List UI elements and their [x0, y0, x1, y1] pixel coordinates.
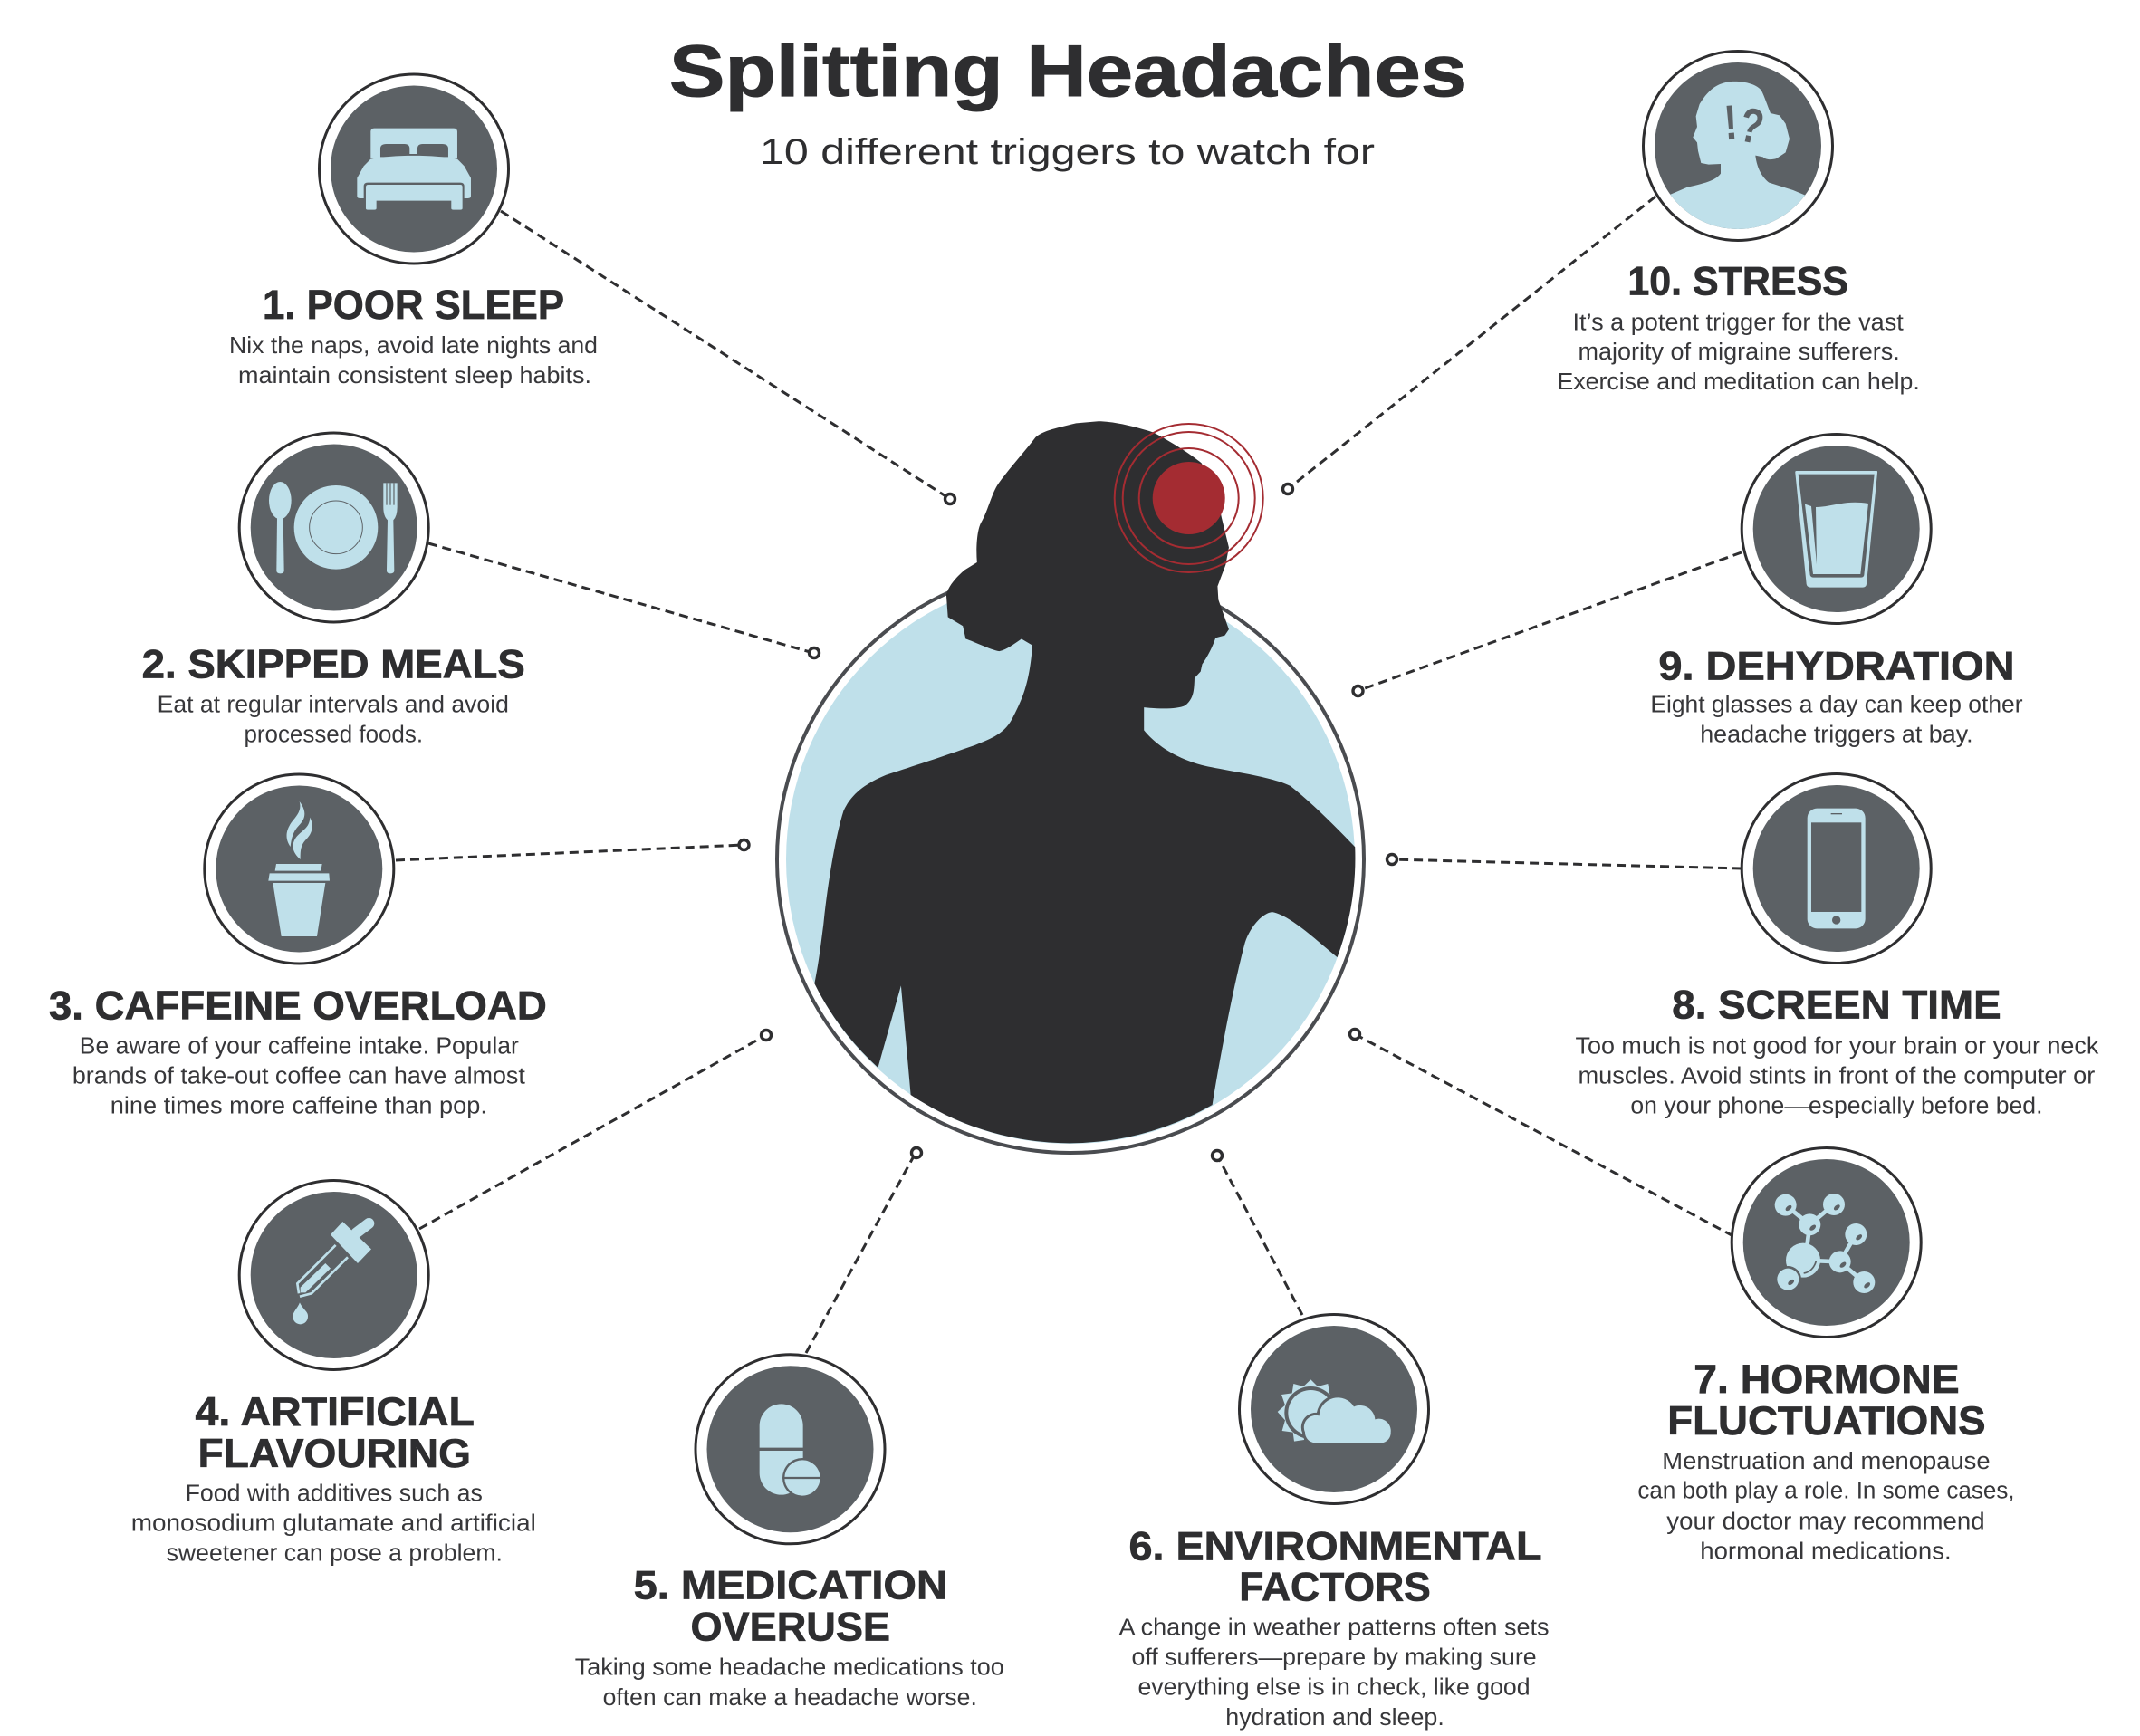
heading: 8. SCREEN TIME	[1672, 982, 2001, 1028]
description: muscles. Avoid stints in front of the computer or	[1579, 1064, 2096, 1089]
description	[1637, 1449, 2015, 1565]
description: on your phone—especially before bed.	[1630, 1094, 2042, 1119]
icon: bed	[319, 74, 509, 264]
heading: 4. ARTIFICIAL	[196, 1388, 475, 1434]
description	[575, 1654, 1004, 1711]
description: maintain consistent sleep habits.	[238, 361, 591, 388]
icon: stressed head: ?	[1734, 97, 1769, 156]
woman silhouette	[814, 421, 1355, 1143]
description: can both play a role. In some cases,	[1637, 1479, 2015, 1504]
panel: caffeine overload	[49, 774, 547, 1119]
connector lines	[396, 197, 1742, 1353]
description	[229, 331, 598, 388]
heading: OVERUSE	[690, 1603, 890, 1649]
panel: skipped meals	[142, 433, 525, 747]
description: majority of migraine sufferers.	[1579, 340, 1900, 365]
heading: 2. SKIPPED MEALS	[142, 641, 525, 687]
heading: FLAVOURING	[198, 1430, 471, 1476]
connector end dots	[739, 484, 1396, 1161]
description: Eat at regular intervals and avoid	[158, 692, 509, 717]
description: your doctor may recommend	[1666, 1510, 1985, 1535]
central figure	[777, 421, 1364, 1153]
description: sweetener can pose a problem.	[167, 1541, 503, 1567]
description	[131, 1482, 536, 1567]
panel: artificial flavouring	[131, 1181, 536, 1567]
heading: 7. HORMONE	[1694, 1356, 1960, 1402]
icon: molecule	[1732, 1148, 1921, 1337]
heading: FLUCTUATIONS	[1667, 1397, 1986, 1443]
heading	[1129, 1523, 1542, 1609]
description: Food with additives such as	[186, 1482, 483, 1507]
description: Be aware of your caffeine intake. Popular	[80, 1034, 519, 1060]
central circle	[777, 566, 1364, 1153]
description: processed foods.	[244, 722, 423, 747]
icon: dropper	[239, 1181, 428, 1369]
heading: 3. CAFFEINE OVERLOAD	[49, 983, 547, 1029]
description	[158, 692, 509, 747]
panel: environmental factors	[1119, 1315, 1550, 1731]
description: Too much is not good for your brain or your neck	[1576, 1034, 2098, 1060]
panel: poor sleep	[229, 74, 598, 388]
description: hormonal medications.	[1700, 1539, 1952, 1565]
heading: FACTORS	[1239, 1563, 1431, 1609]
panel: hormone fluctuations	[1637, 1148, 2015, 1565]
icon: phone	[1742, 773, 1931, 964]
heading: 5. MEDICATION	[634, 1561, 947, 1607]
description: It’s a potent trigger for the vast	[1573, 310, 1905, 335]
description	[1558, 310, 1920, 395]
icon: coffee cup	[205, 774, 394, 964]
description: headache triggers at bay.	[1700, 722, 1973, 747]
icon: glass of water	[1742, 435, 1931, 623]
icon: sun and cloud	[1239, 1315, 1429, 1503]
description: Eight glasses a day can keep other	[1650, 692, 2023, 717]
heading: 1. POOR SLEEP	[263, 282, 564, 328]
description: monosodium glutamate and artificial	[131, 1511, 536, 1537]
icon: pills	[696, 1355, 885, 1544]
description: A change in weather patterns often sets	[1119, 1615, 1550, 1640]
description: hydration and sleep.	[1225, 1705, 1444, 1731]
description: Nix the naps, avoid late nights and	[229, 331, 598, 359]
panel: stress	[1558, 51, 1920, 395]
description	[1650, 692, 2023, 747]
description	[72, 1034, 526, 1119]
heading: 6. ENVIRONMENTAL	[1129, 1523, 1542, 1569]
description: brands of take-out coffee can have almost	[72, 1064, 526, 1089]
heading	[634, 1561, 947, 1649]
heading: 10. STRESS	[1627, 257, 1848, 303]
icon: plate and cutlery	[239, 433, 428, 622]
description: off sufferers—prepare by making sure	[1131, 1645, 1537, 1670]
icon: stressed head: !	[1723, 95, 1739, 150]
heading	[1667, 1356, 1986, 1443]
description	[1119, 1615, 1550, 1731]
description: Menstruation and menopause	[1662, 1449, 1991, 1474]
title: Splitting Headaches	[669, 31, 1467, 112]
pain point	[1115, 424, 1263, 572]
panel: screen time	[1576, 773, 2098, 1119]
subtitle: 10 different triggers to watch for	[760, 132, 1375, 172]
icon: stressed head	[1643, 51, 1833, 241]
heading: 9. DEHYDRATION	[1658, 642, 2015, 688]
heading	[196, 1388, 475, 1476]
description: nine times more caffeine than pop.	[110, 1094, 487, 1119]
description: Exercise and meditation can help.	[1558, 369, 1920, 395]
panel: dehydration	[1650, 435, 2023, 747]
description	[1576, 1034, 2098, 1119]
description: everything else is in check, like good	[1137, 1674, 1531, 1700]
description: Taking some headache medications too	[575, 1654, 1004, 1680]
description: often can make a headache worse.	[603, 1685, 977, 1711]
panel: medication overuse	[575, 1355, 1004, 1711]
